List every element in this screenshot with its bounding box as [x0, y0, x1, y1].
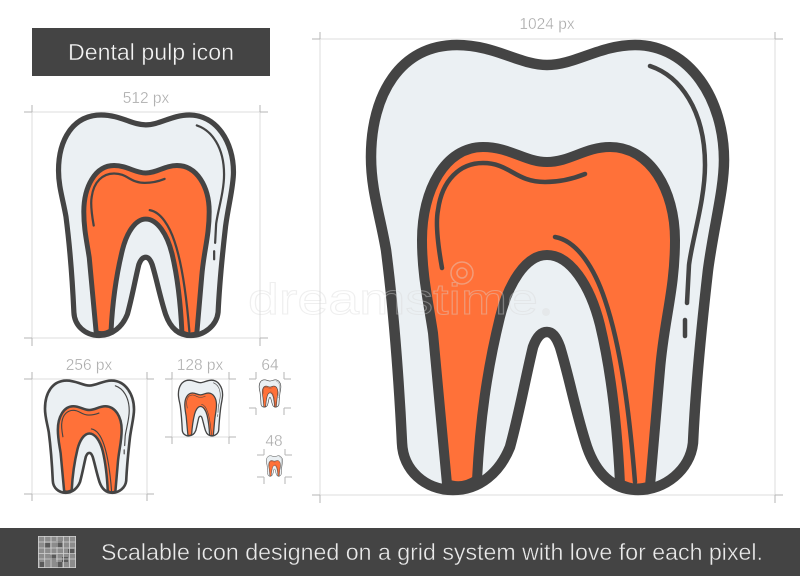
icon: tooth at 64 px: [249, 357, 291, 415]
icon: pixel grid: [38, 536, 76, 568]
tagline: Scalable icon designed on a grid system with love for each pixel.: [101, 539, 763, 565]
footer bar: [0, 528, 800, 576]
title: Dental pulp icon: [68, 39, 234, 65]
icon: tooth at 256 px: [24, 357, 154, 501]
size label: 64: 64: [261, 357, 279, 374]
icon: tooth at 128 px: [165, 357, 236, 444]
icon: tooth at 512 px: [24, 90, 268, 346]
size label: 512 px: 512 px: [123, 90, 170, 107]
watermark: [248, 262, 550, 324]
size label: 1024 px: 1024 px: [519, 16, 575, 33]
title: [32, 28, 270, 76]
size label: 256 px: 256 px: [66, 357, 113, 374]
size label: 48: 48: [265, 433, 283, 450]
size label: 128 px: 128 px: [177, 357, 224, 374]
watermark: dreamstime: [248, 275, 538, 324]
icon: tooth at 48 px: [257, 433, 292, 484]
